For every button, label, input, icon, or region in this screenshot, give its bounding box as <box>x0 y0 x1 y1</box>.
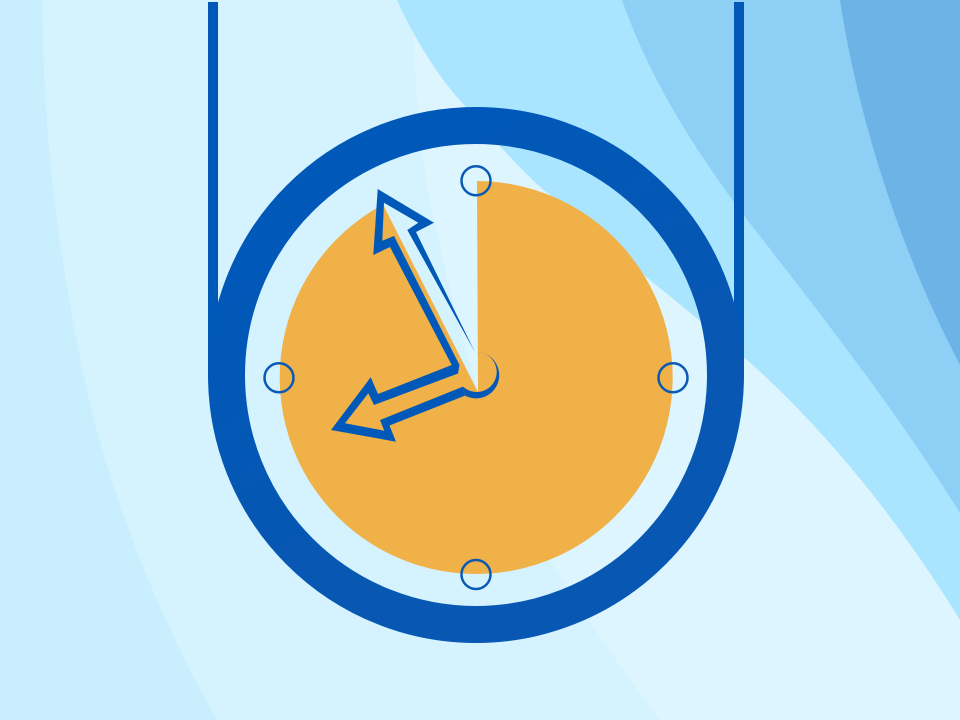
hour marker: 12 <box>462 166 490 195</box>
right hanging bar <box>734 2 744 375</box>
hour marker: 9 <box>264 363 294 392</box>
clock hands: outlined arrows <box>331 189 475 442</box>
orange pie face with elapsed-time slice removed <box>280 181 673 574</box>
hour marker: 6 <box>462 560 490 589</box>
hour marker: 3 <box>658 363 688 392</box>
clock <box>208 2 744 624</box>
clock ring <box>226 126 726 624</box>
clock hub: crescent <box>463 352 499 398</box>
left hanging bar <box>208 2 218 375</box>
